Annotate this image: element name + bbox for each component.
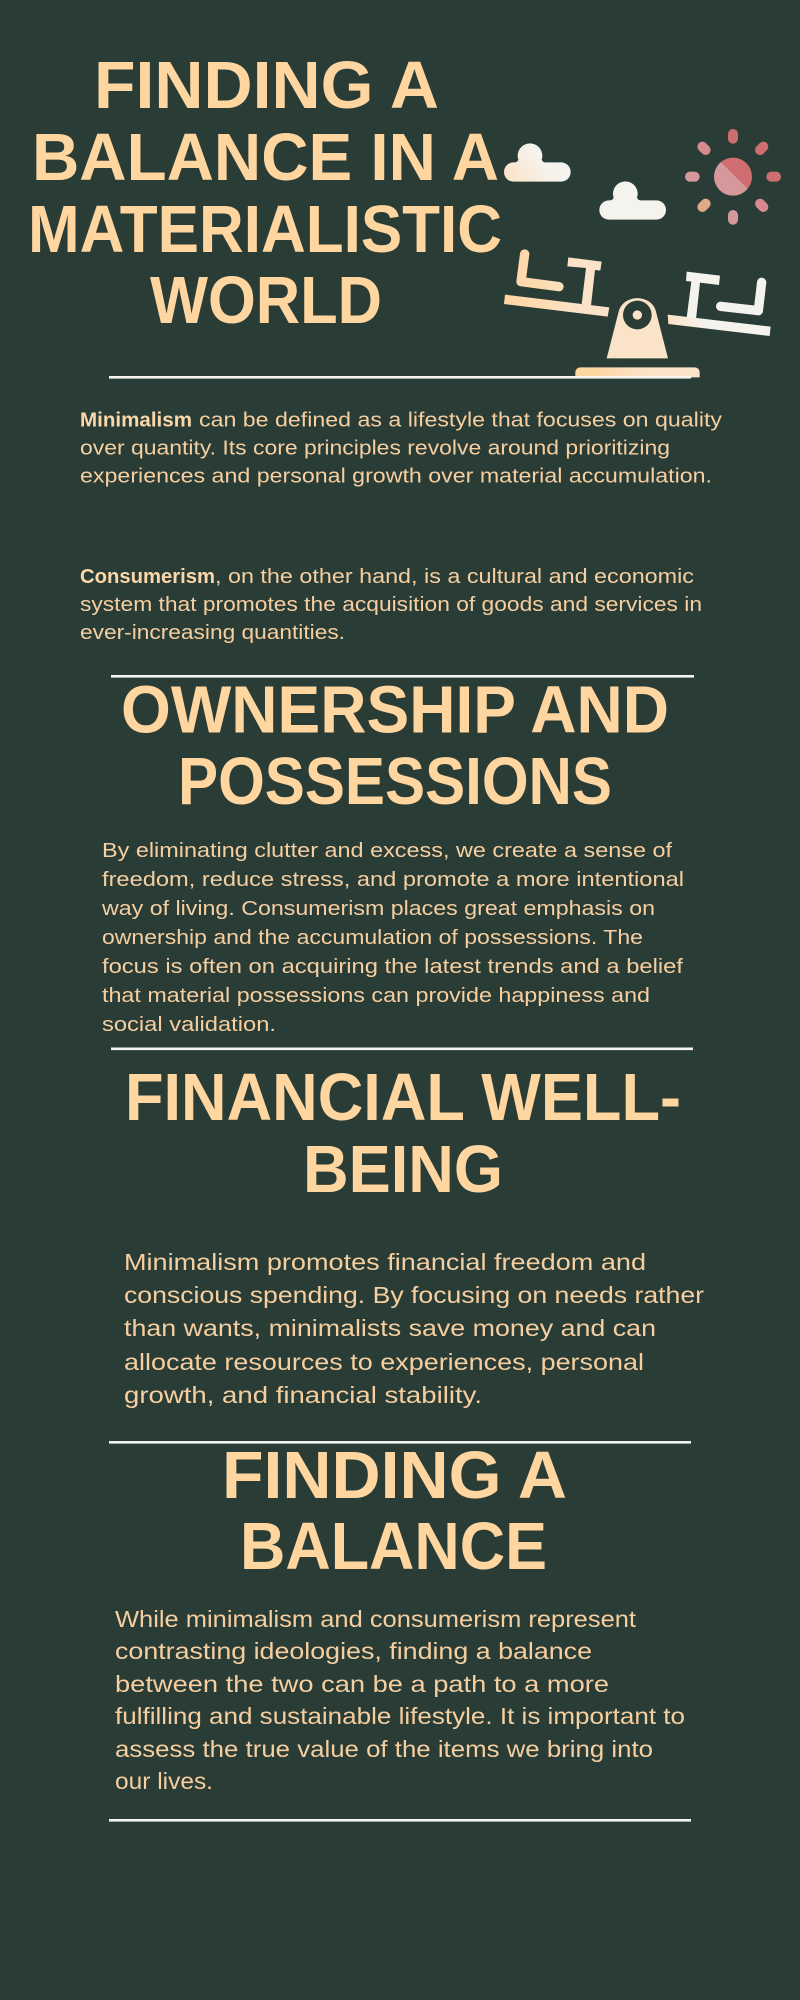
divider [109,1441,691,1444]
text block: ownership: way of living. Consumerism places great emphasis on [101,897,655,920]
text block: minimalism definition [80,410,722,488]
divider under title [109,376,691,379]
illustration: seesaw with clouds and sun [504,129,781,377]
text block: finding a balance: our lives. [115,1768,213,1794]
seesaw pivot [607,298,668,358]
text block: financial well-being: Minimalism promotes financial freedom and [124,1249,646,1275]
heading: financial well-being: BEING [303,1133,503,1207]
title: BALANCE IN A [32,121,499,195]
text block: ownership [101,839,684,1036]
text block: ownership: By eliminating clutter and excess, we create a sense of [102,839,672,862]
text block: consumerism definition: system that promotes the acquisition of goods and services in [80,594,702,616]
text block: consumerism definition: Consumerism [80,566,215,588]
text block: ownership: that material possessions can provide happiness and [102,984,650,1007]
heading: financial well-being [125,1061,681,1207]
text block: consumerism definition: ever-increasing quantities. [80,622,345,644]
text block: ownership: freedom, reduce stress, and promote a more intentional [102,868,684,891]
text block: finding a balance: contrasting ideologies, finding a balance [115,1638,592,1664]
text block: finding a balance: fulfilling and sustainable lifestyle. It is important to [115,1703,685,1729]
text block: ownership: focus is often on acquiring the latest trends and a belief [102,955,683,978]
icon: cloud left [504,143,571,182]
text block: financial well-being: conscious spending. By focusing on needs rather [124,1282,704,1308]
text block: minimalism definition: Minimalism [80,410,192,432]
text block: financial well-being: growth, and financial stability. [124,1382,482,1408]
text block: ownership: ownership and the accumulation of possessions. The [102,926,643,949]
title: FINDING A [94,49,439,123]
text block: financial well-being: than wants, minimalists save money and can [124,1315,656,1341]
seesaw base [575,367,700,377]
text block: finding a balance: assess the true value of the items we bring into [115,1736,653,1762]
divider [111,675,694,678]
text block: minimalism definition: over quantity. Its core principles revolve around prioritizing [80,438,670,460]
seesaw left side [504,254,609,317]
heading: ownership and possessions [121,674,669,819]
heading: ownership and possessions: OWNERSHIP AND [121,674,669,748]
divider [109,1819,691,1822]
seesaw right side [668,272,771,336]
text block: consumerism definition [80,566,702,644]
heading: finding a balance: BALANCE [240,1510,547,1584]
text block: finding a balance: between the two can be a path to a more [115,1671,609,1697]
title: MATERIALISTIC [28,193,502,267]
text block: financial well-being: allocate resources to experiences, personal [124,1349,644,1375]
heading: finding a balance: FINDING A [222,1439,567,1513]
heading: financial well-being: FINANCIAL WELL- [125,1061,681,1135]
text block: consumerism definition: , on the other hand, is a cultural and economic [215,566,694,588]
title: WORLD [150,264,382,338]
heading: ownership and possessions: POSSESSIONS [178,745,612,819]
text block: finding a balance [115,1606,685,1794]
divider [111,1048,693,1050]
text block: minimalism definition: can be defined as a lifestyle that focuses on quality [199,410,722,432]
icon: sun [685,129,781,225]
heading: finding a balance [222,1439,567,1584]
title [28,49,502,338]
icon: cloud right [599,181,666,220]
text block: ownership: social validation. [102,1013,276,1036]
text block: finding a balance: While minimalism and consumerism represent [115,1606,637,1632]
text block: minimalism definition: experiences and personal growth over material accumulation. [80,466,712,488]
text block: financial well-being [124,1249,704,1408]
